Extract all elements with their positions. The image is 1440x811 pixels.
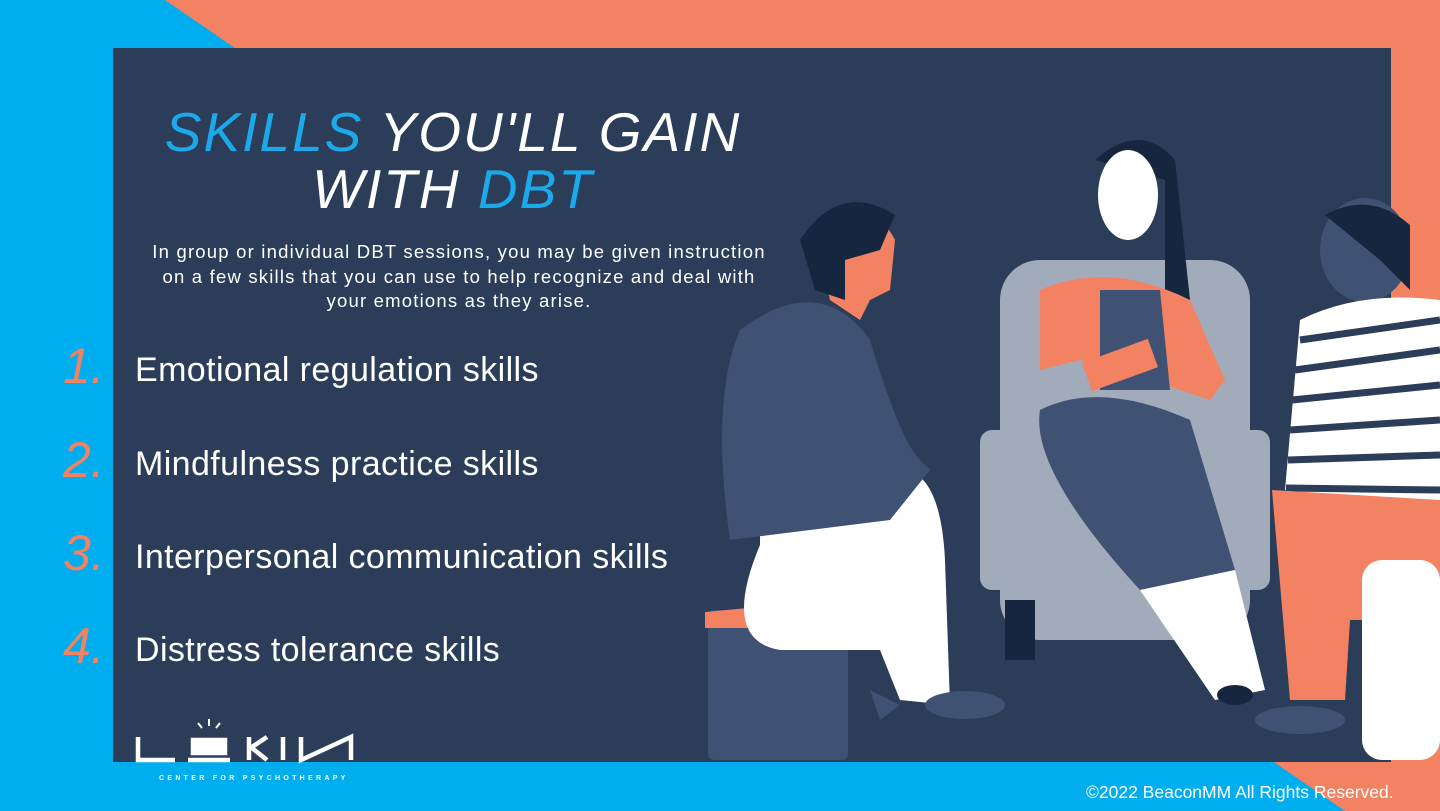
right man xyxy=(1255,198,1440,760)
item 1: Emotional regulation skills xyxy=(135,351,539,389)
copyright: ©2022 BeaconMM All Rights Reserved. xyxy=(1086,782,1394,802)
item 3: Interpersonal communication skills xyxy=(135,538,668,576)
item 4: Distress tolerance skills xyxy=(135,631,500,669)
intro text xyxy=(152,241,766,311)
item 3 xyxy=(63,525,668,581)
item 1 xyxy=(63,338,539,394)
title: WITH DBT xyxy=(312,158,594,220)
intro text: your emotions as they arise. xyxy=(327,290,591,311)
item 2 xyxy=(62,432,539,488)
armchair xyxy=(980,260,1270,660)
list of skills xyxy=(62,338,668,674)
stool left xyxy=(705,598,872,760)
intro text: on a few skills that you can use to help recognize and deal with xyxy=(162,266,756,286)
intro text: In group or individual DBT sessions, you may be given instruction xyxy=(152,241,766,262)
item 4: 4. xyxy=(63,618,105,674)
item 2: Mindfulness practice skills xyxy=(135,445,539,483)
item 3: 3. xyxy=(63,525,105,581)
logo xyxy=(136,719,354,782)
item 2: 2. xyxy=(63,432,105,488)
logo: CENTER FOR PSYCHOTHERAPY xyxy=(159,775,349,782)
item 1: 1. xyxy=(63,338,105,394)
woman xyxy=(1039,140,1265,705)
title: SKILLS YOU'LL GAIN xyxy=(165,101,741,163)
title xyxy=(165,101,741,220)
item 4 xyxy=(63,618,500,674)
left man xyxy=(722,202,1005,720)
